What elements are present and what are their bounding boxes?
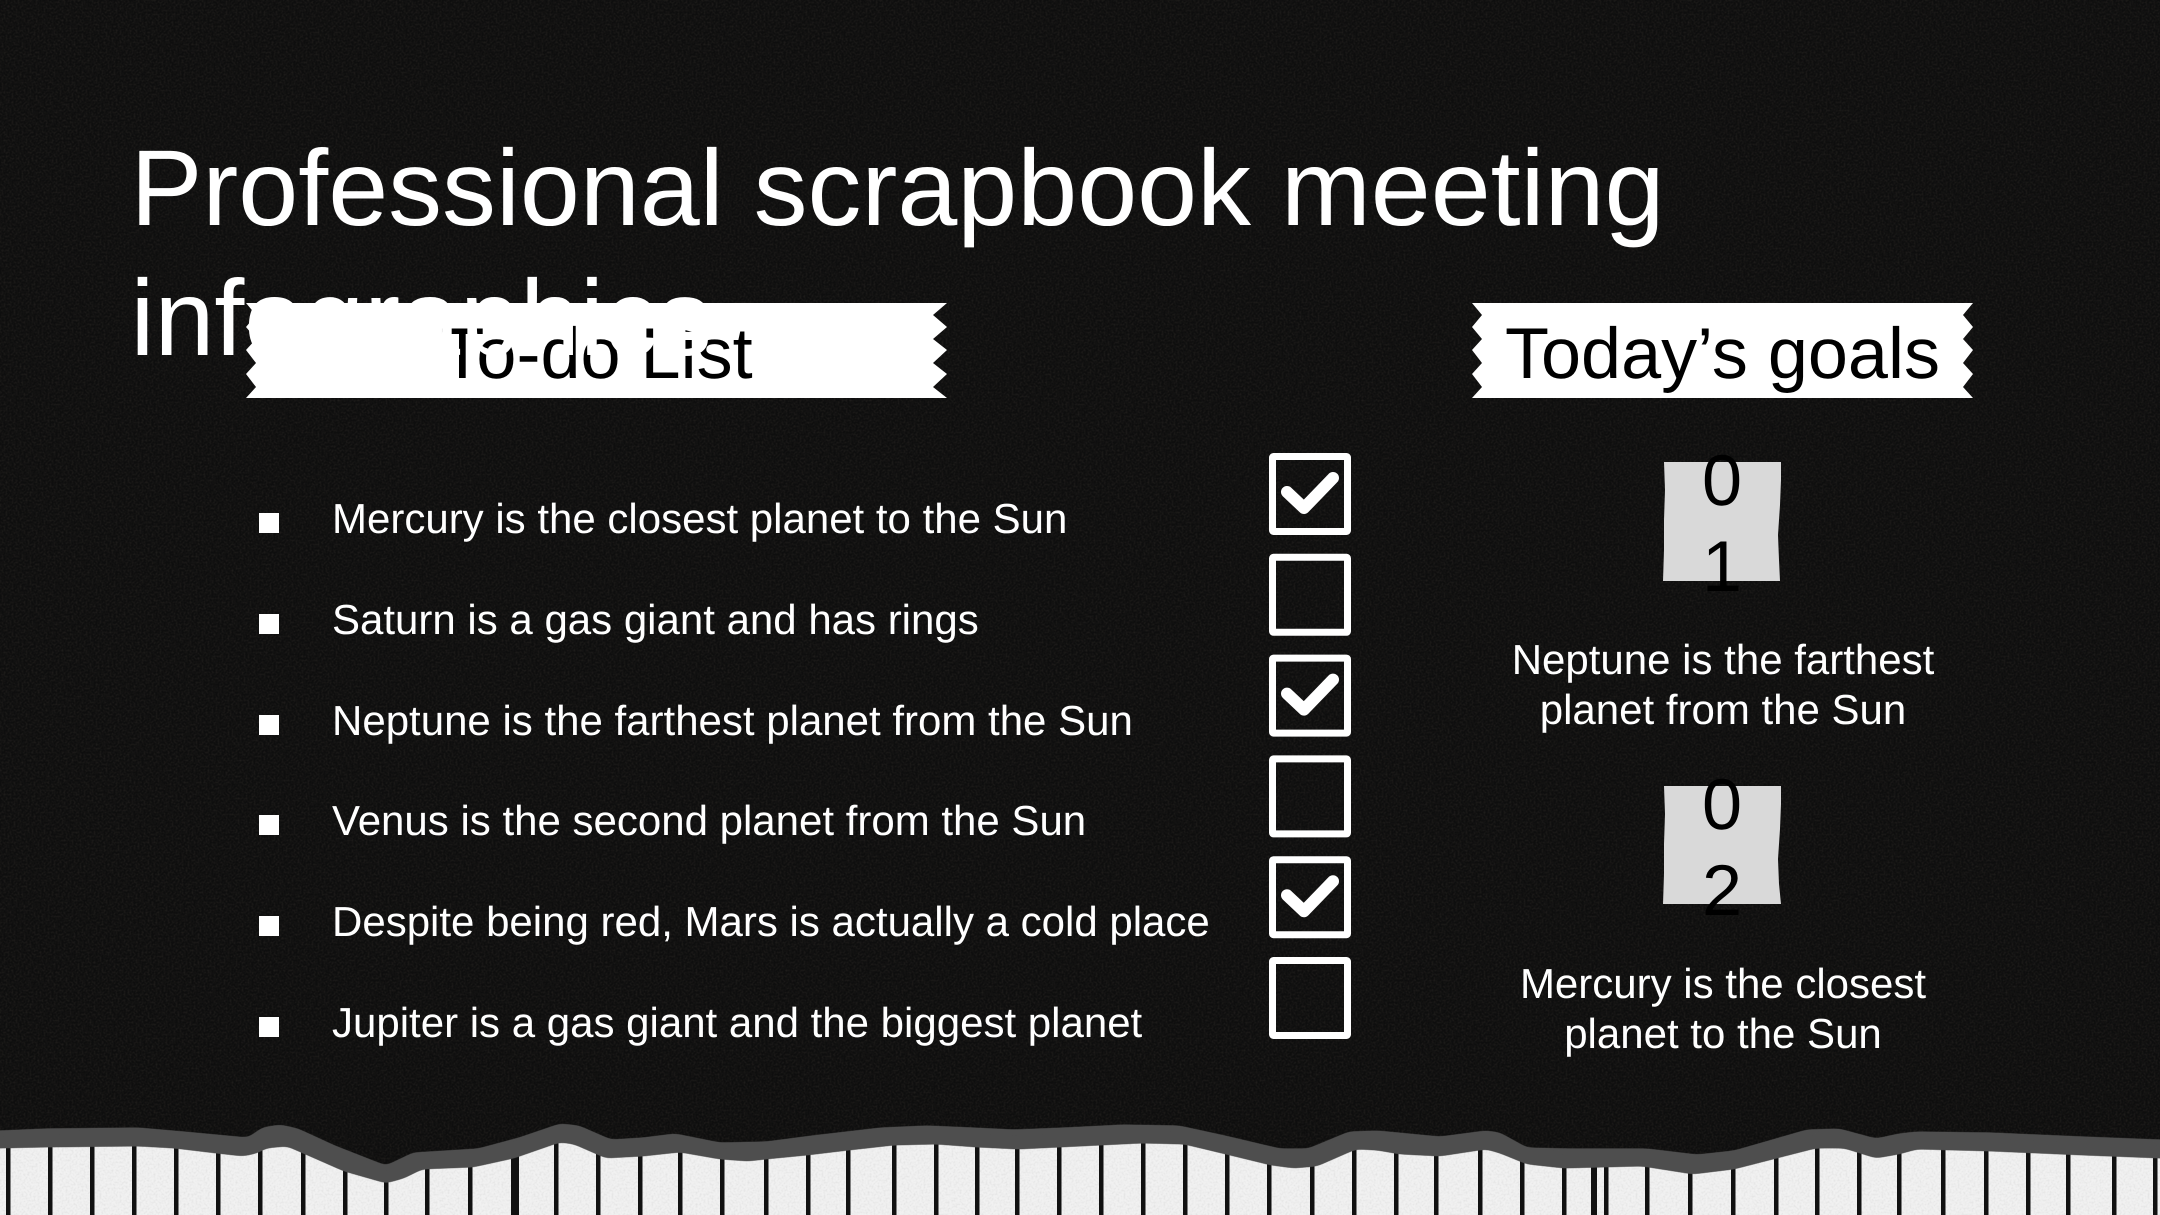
icon: empty box 2 [1272, 557, 1348, 632]
title [130, 127, 1664, 378]
white ruled paper [0, 1142, 2160, 1215]
goal 1 description: planet from the Sun [1540, 686, 1906, 733]
list item 6: Jupiter is a gas giant and the biggest planet [332, 999, 1142, 1046]
tape: Today's goals header shape [1472, 303, 1973, 398]
torn edge band [0, 1123, 2160, 1215]
icon: checked box 3 [1272, 658, 1348, 733]
icon: empty box 6 [1272, 960, 1348, 1036]
list item 3: Neptune is the farthest planet from the Sun [332, 697, 1133, 744]
goal 2 description [1520, 960, 1926, 1057]
to-do list [259, 495, 1210, 1046]
goal 2 number paper [1663, 786, 1781, 904]
heading: To-do List: To-do List [440, 314, 753, 394]
goal 2 number: 02 [1702, 765, 1742, 931]
icon: checked box 5 [1272, 860, 1348, 935]
torn notebook paper strip [0, 1124, 2160, 1215]
list item 5: Despite being red, Mars is actually a cold place [332, 898, 1210, 945]
goal 2 description: Mercury is the closest [1520, 960, 1926, 1007]
goal 1 number: 01 [1702, 441, 1742, 607]
icon: checked box 1 [1272, 456, 1348, 532]
tape: To-do List header shape [246, 303, 947, 398]
title: infographics [130, 257, 712, 378]
goal 1 description: Neptune is the farthest [1512, 636, 1934, 683]
heading: Today's goals: Today’s goals [1505, 314, 1940, 394]
list item 2: Saturn is a gas giant and has rings [332, 596, 979, 643]
checkboxes column [1269, 453, 1351, 1039]
goal 1 description [1512, 636, 1934, 733]
list item 1: Mercury is the closest planet to the Sun [332, 495, 1067, 542]
goal 1 number paper [1663, 462, 1781, 581]
icon: empty box 4 [1272, 759, 1348, 834]
goal 2 description: planet to the Sun [1564, 1010, 1882, 1057]
list item 4: Venus is the second planet from the Sun [332, 797, 1086, 844]
title: Professional scrapbook meeting [130, 127, 1664, 248]
